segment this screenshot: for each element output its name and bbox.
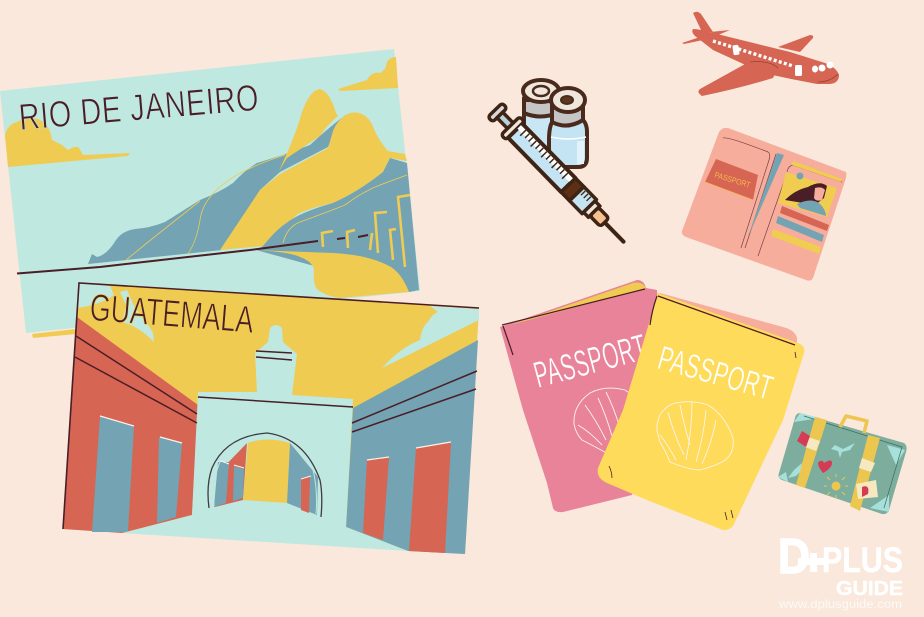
skyline [322, 195, 410, 267]
airplane windows [713, 41, 834, 76]
left building [63, 317, 198, 533]
straps [796, 417, 827, 488]
stickers [797, 431, 810, 447]
roof lines [75, 336, 477, 432]
suitcase corners [778, 413, 905, 512]
icon: suitcase [778, 413, 907, 514]
icon: syringe [486, 101, 634, 252]
yellow back peak [279, 89, 338, 171]
blue ridge [88, 114, 347, 264]
yellow front mountain [220, 112, 407, 250]
heading: Guatemala: GUATEMALA [88, 287, 256, 342]
centre flap [748, 153, 784, 237]
ID photo [778, 172, 837, 217]
wallet seams [723, 138, 842, 256]
icon: vaccine vials [523, 80, 587, 167]
website URL: www.dplusguide.com [778, 599, 902, 611]
yellow shell [657, 402, 733, 470]
logo GUIDE: GUIDE [836, 578, 903, 600]
panel: Rio de Janeiro postcard [0, 49, 420, 338]
logo plus sign [798, 553, 825, 572]
panel: Guatemala postcard [63, 283, 479, 554]
right building [346, 340, 478, 554]
icon: passport wallet [682, 128, 846, 281]
icon: airplane [682, 12, 839, 96]
passport tag [705, 159, 758, 200]
cloud right [338, 57, 398, 91]
pink shell [574, 388, 640, 456]
pink passport label: PASSPORT [530, 327, 651, 396]
blue doors [92, 416, 134, 532]
right blue land [256, 158, 419, 292]
logo: D+ Plus Guide [778, 530, 903, 611]
road lines [125, 201, 200, 261]
heading: Rio de Janeiro: RIO DE JANEIRO [17, 78, 260, 139]
logo D: D [778, 530, 810, 584]
card slots [780, 206, 829, 231]
sticker: plane [831, 443, 855, 458]
sticker: heart [818, 460, 832, 473]
icon: yellow passport [598, 293, 804, 530]
postcard border [63, 283, 479, 529]
arch tower [122, 325, 408, 551]
yellow passport label: PASSPORT [654, 339, 777, 408]
logo PLUS: PLUS [822, 541, 903, 580]
sky clouds [77, 283, 114, 308]
horizon line [17, 235, 368, 274]
cloud left [5, 118, 130, 167]
red doors [363, 457, 389, 540]
icon: pink passport [500, 280, 660, 512]
tag label: PASSPORT [713, 170, 752, 190]
arch interior [208, 433, 322, 517]
suitcase handle [840, 416, 867, 433]
sticker: sun [832, 482, 840, 490]
yellow beach [253, 250, 409, 298]
top yellow strip [792, 161, 842, 182]
